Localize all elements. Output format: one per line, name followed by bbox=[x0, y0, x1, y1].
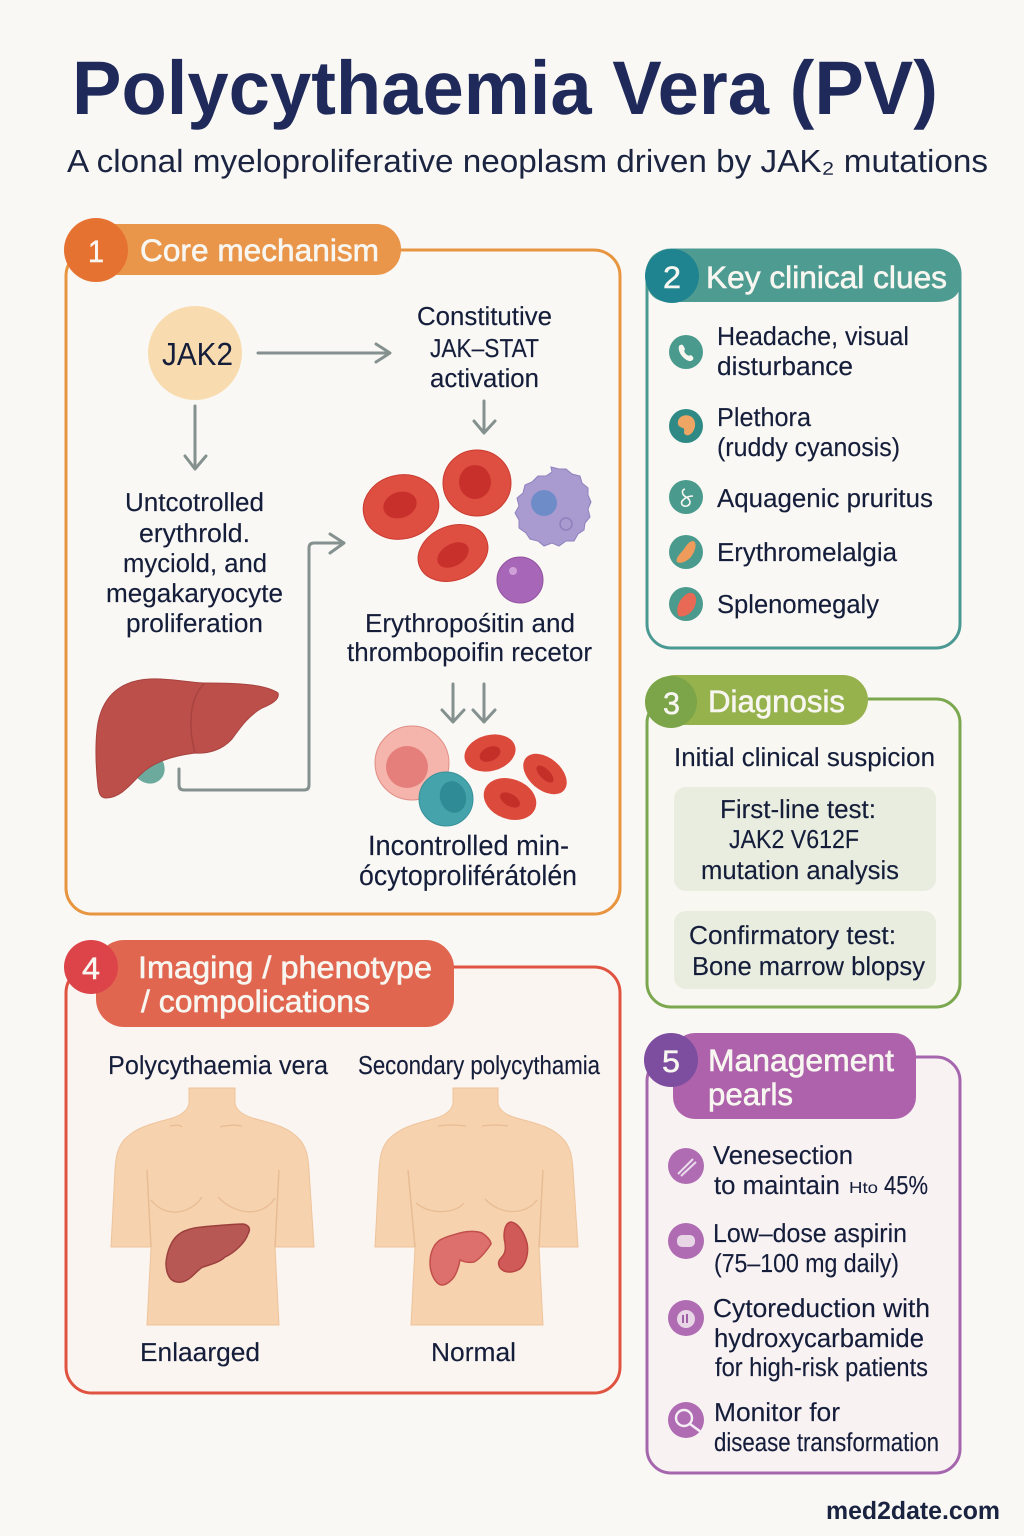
label: secondary polycythaemia: Secondary polycythamia bbox=[358, 1050, 600, 1080]
text: JAK-STAT activation: Constitutive bbox=[417, 301, 552, 331]
text: JAK-STAT activation bbox=[417, 301, 552, 393]
item: headache: Headache, visual bbox=[717, 321, 909, 351]
item: aquagenic pruritus: Aquagenic pruritus bbox=[717, 483, 933, 513]
arrow: JAK2 to JAK-STAT bbox=[258, 344, 390, 362]
header: imaging: Imaging / phenotype bbox=[138, 950, 432, 985]
connector arrow: liver to cells bbox=[179, 534, 344, 790]
panel: diagnosis bbox=[645, 675, 960, 1007]
header: key clinical clues: 2 bbox=[663, 260, 681, 295]
panel: imaging bbox=[64, 940, 620, 1393]
header: diagnosis bbox=[645, 675, 868, 728]
item: aspirin bbox=[668, 1218, 907, 1278]
item: venesection: Hto bbox=[849, 1180, 878, 1197]
header: diagnosis: 3 bbox=[663, 686, 680, 721]
text: uncontrolled proliferation: myciold, and bbox=[123, 548, 267, 578]
item: plethora: (ruddy cyanosis) bbox=[717, 432, 900, 462]
text: uncontrolled proliferation bbox=[106, 487, 283, 638]
text: receptor: Erythropośitin and bbox=[365, 608, 575, 638]
header: core mechanism bbox=[64, 218, 401, 282]
header: core mechanism: 1 bbox=[88, 234, 104, 269]
label: polycythaemia vera: Polycythaemia vera bbox=[108, 1050, 329, 1080]
item: monitor bbox=[668, 1397, 939, 1457]
box: first-line test bbox=[674, 787, 936, 891]
box: first-line test: mutation analysis bbox=[701, 855, 899, 885]
subtitle: A clonal myeloproliferative neoplasm driven by JAK₂ mutations bbox=[67, 143, 988, 179]
text: incontrolled bbox=[359, 830, 577, 891]
text: initial suspicion: Initial clinical suspicion bbox=[674, 742, 935, 772]
header: management pearls: 5 bbox=[662, 1044, 680, 1079]
text: JAK-STAT activation: JAK–STAT bbox=[430, 333, 539, 363]
item: erythromelalgia: Erythromelalgia bbox=[717, 537, 898, 567]
header: management pearls: Management bbox=[708, 1043, 894, 1078]
JAK2 node bbox=[148, 306, 242, 400]
label: enlarged: Enlaarged bbox=[140, 1337, 260, 1367]
header: imaging bbox=[64, 940, 454, 1027]
JAK2 node: JAK2 bbox=[162, 336, 233, 372]
item: monitor: disease transformation bbox=[714, 1427, 939, 1457]
arrow: activation to cells bbox=[474, 401, 495, 433]
double arrows bbox=[442, 684, 495, 722]
item: erythromelalgia bbox=[669, 535, 898, 569]
box: confirmatory test: Bone marrow blopsy bbox=[692, 951, 925, 981]
item: venesection: Venesection bbox=[713, 1140, 853, 1170]
item: cytoreduction: Cytoreduction with bbox=[713, 1293, 930, 1323]
text: uncontrolled proliferation: erythrold. bbox=[139, 518, 250, 548]
item: cytoreduction bbox=[668, 1293, 930, 1382]
header: management pearls bbox=[644, 1033, 916, 1119]
item: venesection: 45% bbox=[884, 1170, 928, 1200]
panel: key clinical clues bbox=[645, 249, 961, 648]
item: aspirin: Low–dose aspirin bbox=[713, 1218, 907, 1248]
cell cluster: mixed cells bbox=[375, 726, 574, 827]
item: splenomegaly bbox=[669, 587, 879, 621]
title: Polycythaemia Vera (PV) bbox=[72, 46, 938, 131]
item: headache bbox=[669, 321, 909, 381]
box: confirmatory test bbox=[674, 911, 936, 989]
panel: core mechanism bbox=[64, 218, 620, 914]
text: JAK-STAT activation: activation bbox=[430, 363, 539, 393]
item: venesection bbox=[668, 1140, 928, 1200]
text: uncontrolled proliferation: Untcotrolled bbox=[125, 487, 264, 517]
header: diagnosis: Diagnosis bbox=[708, 684, 845, 719]
item: cytoreduction: hydroxycarbamide bbox=[714, 1323, 924, 1353]
text: uncontrolled proliferation: proliferation bbox=[126, 608, 263, 638]
header: core mechanism: Core mechanism bbox=[140, 233, 379, 268]
text: incontrolled: Incontrolled min- bbox=[368, 830, 569, 861]
text: uncontrolled proliferation: megakaryocyte bbox=[106, 578, 283, 608]
footer: source: med2date.com bbox=[826, 1497, 1000, 1525]
arrow: JAK2 to proliferation bbox=[185, 406, 206, 469]
item: splenomegaly: Splenomegaly bbox=[717, 589, 879, 619]
header: key clinical clues bbox=[645, 249, 961, 303]
box: first-line test: First-line test: bbox=[720, 794, 876, 824]
panel: management pearls bbox=[644, 1033, 960, 1473]
item: venesection: to maintain bbox=[714, 1170, 840, 1200]
text: receptor bbox=[347, 608, 592, 667]
box: first-line test: JAK2 V612F bbox=[729, 824, 859, 854]
header: imaging: / compolications bbox=[141, 984, 370, 1019]
label: normal: Normal bbox=[431, 1337, 516, 1367]
torso: PV with enlarged liver bbox=[111, 1088, 314, 1325]
header: key clinical clues: Key clinical clues bbox=[706, 260, 947, 295]
item: aspirin: (75–100 mg daily) bbox=[714, 1248, 899, 1278]
header: management pearls: pearls bbox=[708, 1077, 793, 1112]
item: plethora: Plethora bbox=[717, 402, 812, 432]
header: imaging: 4 bbox=[82, 951, 100, 986]
item: headache: disturbance bbox=[717, 351, 853, 381]
item: cytoreduction: for high-risk patients bbox=[715, 1352, 928, 1382]
text: receptor: thrombopoifin recetor bbox=[347, 637, 592, 667]
item: monitor: Monitor for bbox=[714, 1397, 840, 1427]
text: incontrolled: ócytoproliférátolén bbox=[359, 860, 577, 891]
icon: liver bbox=[96, 679, 278, 798]
cell cluster: red cells and megakaryocyte bbox=[357, 450, 591, 603]
item: plethora bbox=[669, 402, 900, 462]
torso: secondary with normal liver and spleen bbox=[375, 1088, 578, 1325]
box: confirmatory test: Confirmatory test: bbox=[689, 920, 896, 950]
